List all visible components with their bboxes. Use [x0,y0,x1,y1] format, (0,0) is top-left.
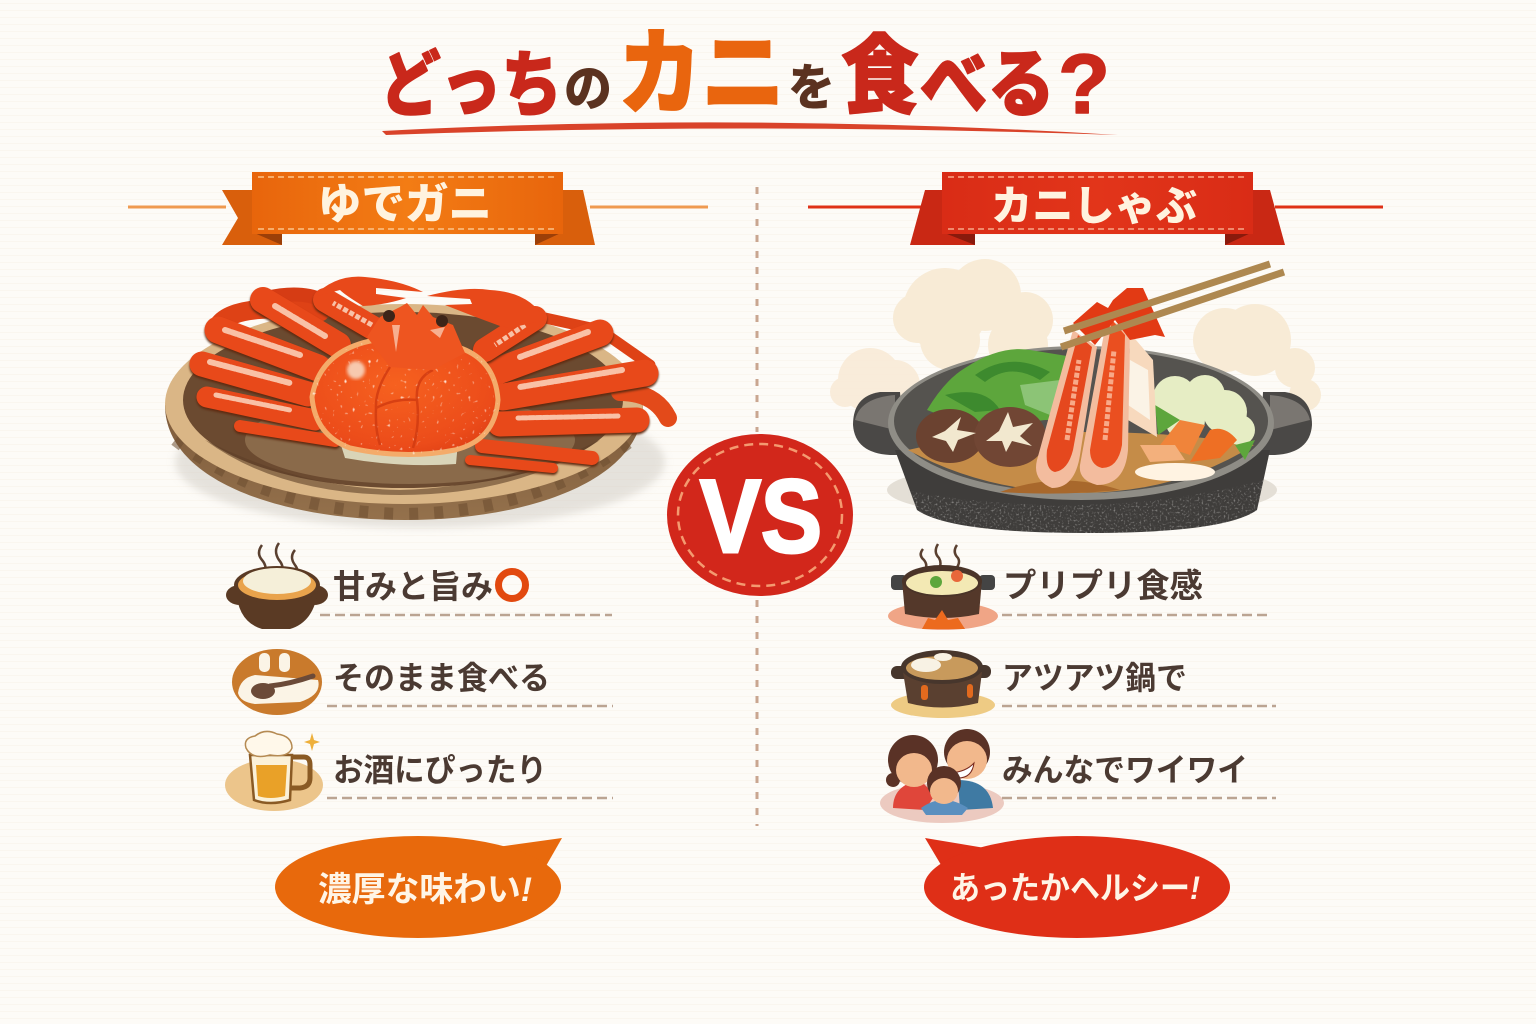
VS badge [667,434,853,596]
illustration: crab shabu hot pot [830,259,1321,533]
claws [313,277,545,350]
title: を [788,60,835,116]
pot rim and interior [888,346,1274,500]
title underline [382,122,1118,135]
text: お酒にぴったり: お酒にぴったり [333,752,547,788]
pale crab leg behind [1128,333,1157,437]
icon: beer mug [225,731,323,811]
wooden plate [165,304,643,520]
feature list: crab shabu [880,544,1276,823]
text: そのまま食べる: そのまま食べる [333,660,550,696]
feature list: boiled crab [225,543,613,811]
pot handles [853,392,1312,455]
icon: family [880,729,1004,823]
ribbon: カニしゃぶ [808,172,1383,245]
speech bubble: あったかヘルシー [924,836,1230,938]
chopsticks [1061,264,1284,347]
shiitake mushrooms [916,407,1046,467]
crab shell lobes [376,367,433,448]
text: みんなでワイワイ: みんなでワイワイ [1002,752,1248,788]
title [380,21,1110,131]
greens [927,349,1067,425]
pot shadow [887,460,1277,520]
ribbon label: カニしゃぶ [991,183,1197,229]
center divider [756,187,758,826]
crab head [367,303,465,370]
title: べる [920,43,1055,126]
carrots and crab meat [1135,420,1237,481]
left legs [202,300,338,441]
ribbon: ゆでガニ [128,172,708,245]
icon: plate with spoon [232,649,322,715]
speech bubble: 濃厚な味わい: 濃厚な味わい! [318,871,532,909]
crab body [312,338,498,455]
cauliflower [1153,375,1255,445]
shell underside [340,442,458,465]
back legs [217,294,668,418]
illustration: boiled crab on wooden plate [165,277,668,528]
pot body [895,450,1270,533]
steam clouds [893,259,1321,411]
title: どっち [380,46,562,126]
ribbon label: ゆでガニ [318,181,492,229]
text: プリプリ食感: プリプリ食感 [1003,567,1203,604]
speech bubble: 濃厚な味わい [275,836,562,938]
crab eyes [383,310,448,327]
icon: nabe pot [891,650,995,718]
crab legs [1036,288,1165,488]
title: ? [1058,37,1110,131]
title: の [564,61,612,117]
icon: ring mark [498,572,526,598]
speech bubble: あったかヘルシー: あったかヘルシー! [950,870,1200,906]
icon: rice pot [226,543,328,629]
VS text: VS [700,459,822,575]
text: アツアツ鍋で: アツアツ鍋で [1002,660,1187,696]
title: カニ [618,21,785,126]
icon: pot on fire [888,544,998,630]
text: 甘みと旨み: 甘みと旨み [333,568,493,605]
right legs [470,332,645,468]
title: 食 [841,29,919,125]
